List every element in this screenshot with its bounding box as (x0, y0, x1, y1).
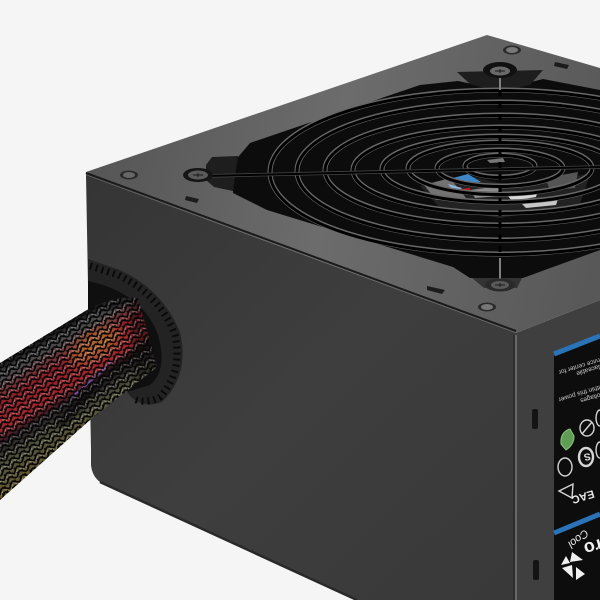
fan screws (183, 62, 517, 292)
label: EAC (570, 487, 596, 505)
grommet (88, 259, 183, 404)
label logo (561, 527, 600, 580)
fan blades (420, 158, 590, 218)
power cable (0, 298, 157, 500)
fan grill rings (270, 90, 600, 254)
case screws and slots (120, 46, 569, 312)
grill spokes (205, 76, 600, 280)
label warning text (559, 358, 600, 402)
fan screw brackets (206, 70, 543, 288)
mounting slots (532, 409, 539, 580)
panel: side face with label (514, 300, 600, 600)
panel: top face with fan (86, 35, 600, 333)
label logo: Cool (565, 527, 591, 550)
fan opening (233, 79, 600, 278)
label (554, 336, 600, 600)
label: S (583, 450, 591, 462)
label certification icons (558, 410, 600, 498)
panel: front face (86, 173, 516, 600)
